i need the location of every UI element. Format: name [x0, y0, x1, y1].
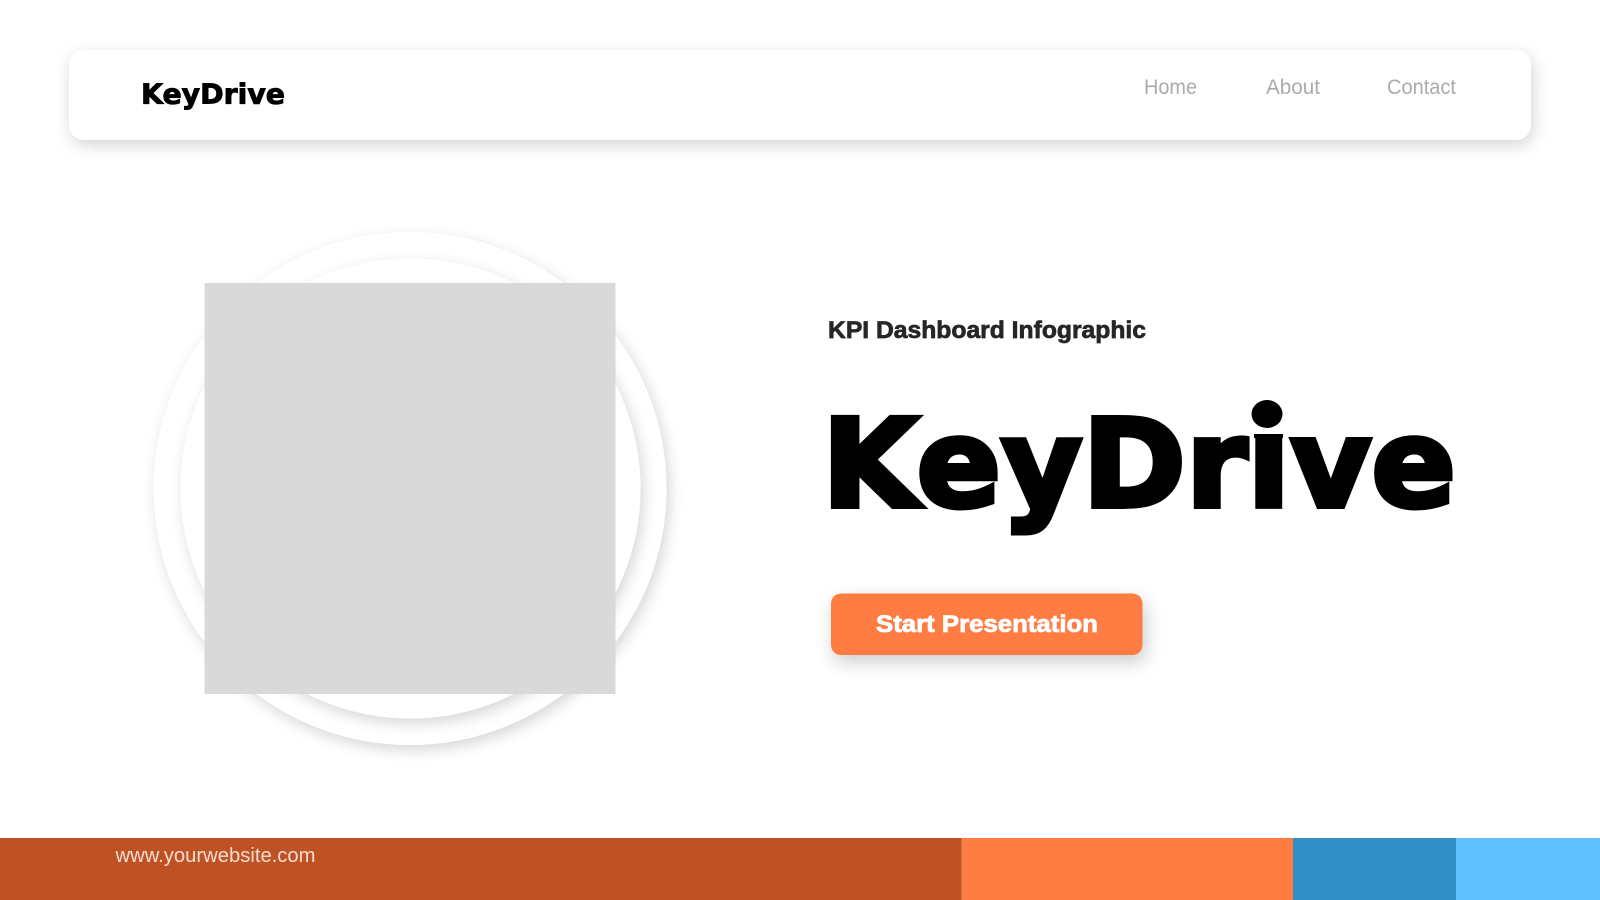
- footer segment: light blue: [1456, 838, 1600, 900]
- nav links: Home: [1144, 76, 1197, 99]
- nav links: [1144, 76, 1456, 99]
- main title: KeyDrive: [822, 394, 1456, 536]
- nav links: About: [1266, 76, 1320, 99]
- button shape: [831, 594, 1142, 655]
- footer segment: orange: [962, 838, 1293, 900]
- inner ring: [180, 258, 640, 718]
- nav logo: KeyDrive: [141, 78, 285, 110]
- website url: www.yourwebsite.com: [114, 845, 315, 867]
- subtitle: KPI Dashboard Infographic: [828, 317, 1146, 344]
- nav panel: [69, 50, 1531, 140]
- image placeholder with rings: [154, 232, 666, 745]
- button label: Start Presentation: [876, 611, 1098, 638]
- start presentation button: [831, 594, 1142, 655]
- nav links: Contact: [1387, 76, 1456, 99]
- navigation bar: [69, 50, 1531, 140]
- footer segment: blue: [1293, 838, 1456, 900]
- grey image placeholder: [204, 283, 616, 694]
- footer colour bar: [0, 838, 1600, 900]
- footer segment: rust: [0, 838, 962, 900]
- outer ring: [154, 232, 666, 745]
